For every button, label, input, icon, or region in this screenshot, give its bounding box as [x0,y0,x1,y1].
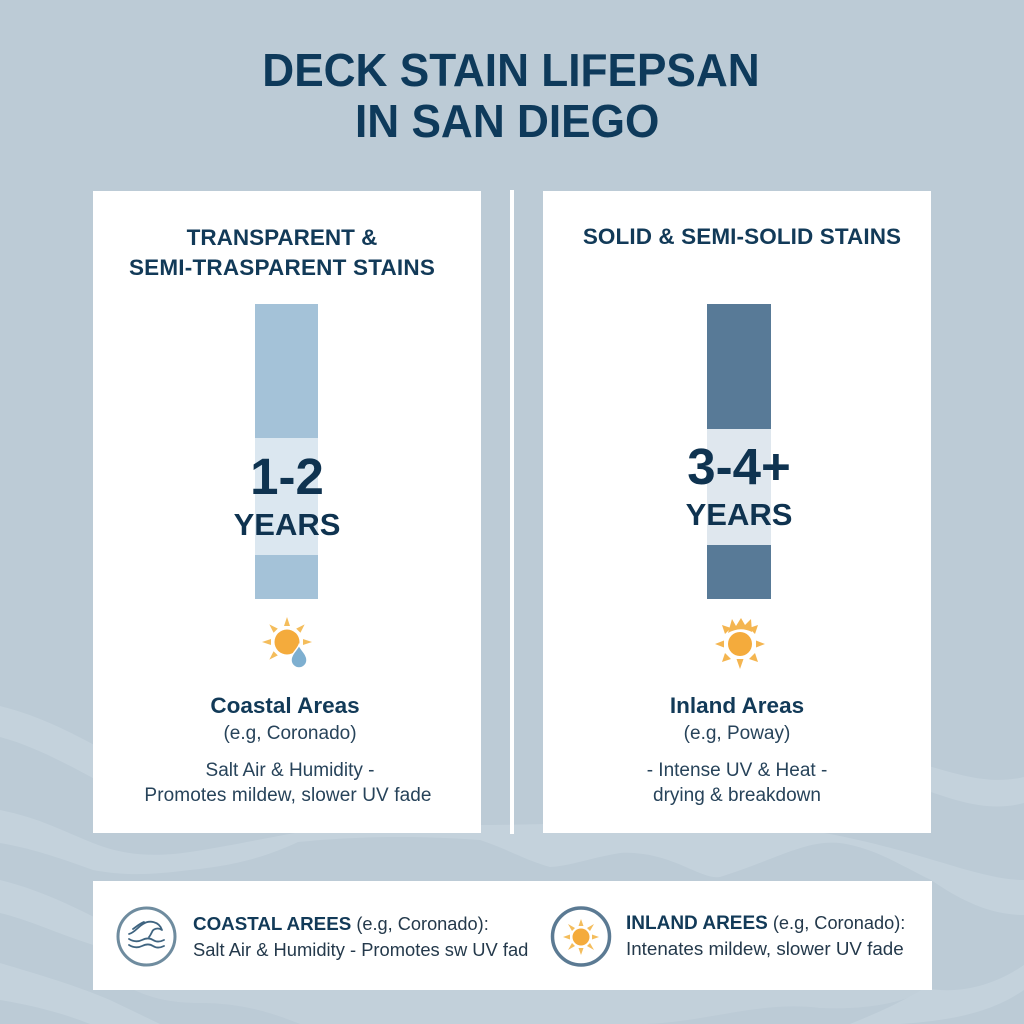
inland legend text: Intenates mildew, slower UV fade [626,938,904,959]
lifespan bar [255,304,318,599]
icon: inland sun [550,906,612,967]
panel heading: SEMI-TRASPARENT STAINS [129,255,435,280]
icon: coastal wave [116,906,176,966]
lifespan value: 1-2 [250,448,324,505]
coastal legend text: Salt Air & Humidity - Promotes sw UV fad [193,939,528,960]
title: IN SAN DIEGO [355,95,659,147]
area description: - Intense UV & Heat - [647,760,827,781]
lifespan unit: YEARS [234,507,340,542]
area name: Inland Areas [670,693,804,718]
area description [144,760,432,806]
area example: (e.g, Coronado) [223,723,357,744]
panel: solid stains [543,191,931,833]
area description [647,760,827,806]
area description: drying & breakdown [653,785,821,806]
icon: sun with water drop [262,617,312,668]
lifespan value: 3-4+ [687,438,791,495]
icon: intense sun [715,618,765,669]
inland legend text: INLAND AREES (e.g, Coronado): [626,913,905,934]
panel: transparent stains [93,191,481,833]
area description: Promotes mildew, slower UV fade [144,785,432,806]
panel heading: TRANSPARENT & [187,225,377,250]
panel heading [129,225,435,280]
area name: Coastal Areas [210,693,360,718]
lifespan bar [707,304,771,599]
title: DECK STAIN LIFEPSAN [262,44,760,96]
area description: Salt Air & Humidity - [206,760,374,781]
legend panel [93,881,932,990]
bar highlight [255,438,318,555]
panel heading: SOLID & SEMI-SOLID STAINS [583,224,901,249]
bar highlight [707,429,771,545]
lifespan unit: YEARS [686,497,792,532]
coastal legend text: COASTAL AREES (e.g, Coronado): [193,913,489,934]
area example: (e.g, Poway) [684,723,790,744]
inland legend text [626,913,905,959]
coastal legend text [193,913,528,960]
center divider [510,190,514,834]
title [262,44,760,147]
